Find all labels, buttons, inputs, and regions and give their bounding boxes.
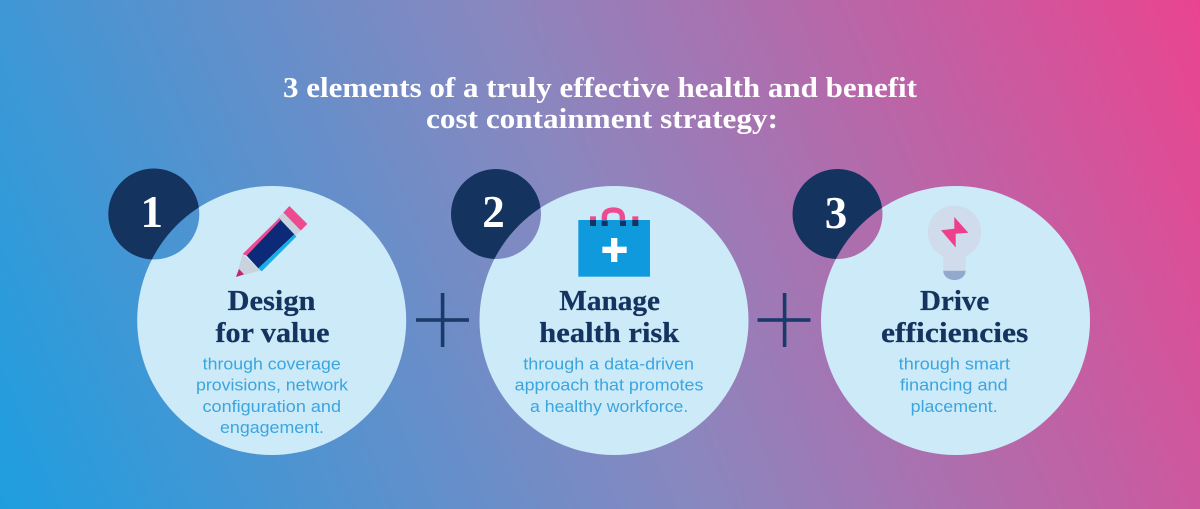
number badge 2: 2 (482, 187, 505, 237)
number badge 2 (451, 169, 541, 259)
title (283, 72, 917, 135)
description (196, 354, 349, 437)
circle: panel 2 background (480, 186, 748, 455)
description: engagement. (220, 418, 324, 437)
description (899, 354, 1010, 416)
description: through a data-driven (523, 354, 694, 374)
description: a healthy workforce. (530, 397, 688, 416)
description: configuration and (202, 397, 341, 416)
number badge 3: 3 (825, 188, 847, 238)
description: financing and (900, 376, 1008, 395)
heading: efficiencies (881, 317, 1028, 349)
title: cost containment strategy: (426, 103, 778, 135)
circle: panel 1 background (137, 186, 406, 455)
description: approach that promotes (515, 376, 703, 395)
heading: for value (216, 317, 330, 349)
heading: Drive (920, 285, 989, 317)
heading: health risk (539, 317, 680, 349)
icon: light bulb (928, 206, 981, 280)
number badge 3 (792, 169, 882, 259)
description (515, 354, 703, 416)
number badge 1 (108, 168, 199, 260)
panel: design for value (108, 168, 406, 455)
title: 3 elements of a truly effective health and benefit (283, 72, 917, 104)
heading: Design (228, 285, 316, 317)
icon: medical bag (578, 210, 650, 277)
plus sign 1 (416, 293, 469, 347)
description: through smart (899, 354, 1010, 374)
panel: manage health risk (451, 169, 748, 455)
description: placement. (911, 397, 998, 416)
heading (539, 285, 680, 349)
description: through coverage (203, 354, 341, 374)
number badge 1: 1 (141, 187, 163, 237)
heading: Manage (559, 285, 660, 317)
heading (216, 285, 330, 349)
description: provisions, network (196, 376, 349, 395)
circle: panel 3 background (821, 186, 1090, 455)
icon: pencil (236, 206, 307, 277)
heading (881, 285, 1028, 349)
plus sign 2 (758, 293, 810, 347)
panel: drive efficiencies (792, 169, 1090, 455)
